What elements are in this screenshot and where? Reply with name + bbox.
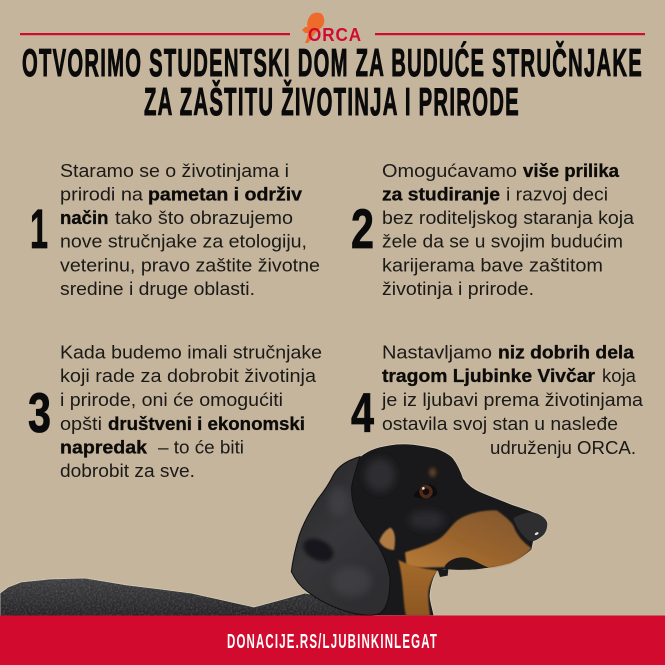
text block 4: koja xyxy=(602,365,637,386)
illustration: dachshund xyxy=(0,444,547,617)
number 2: 2 xyxy=(351,197,374,260)
text block 3: dobrobit za sve. xyxy=(60,460,195,481)
text block 3: opšti xyxy=(60,413,102,434)
text block 1: pametan i održiv xyxy=(148,184,303,204)
number 3: 3 xyxy=(28,381,51,444)
panel: point 3 xyxy=(28,342,322,481)
muzzle tan xyxy=(405,510,532,568)
footer link text: DONACIJE.RS/LJUBINKINLEGAT xyxy=(227,631,438,653)
dog head xyxy=(291,444,547,616)
number 1: 1 xyxy=(30,197,48,260)
text block 3: Kada budemo imali stručnjake xyxy=(60,342,322,362)
text block 2: životinja i prirode. xyxy=(382,278,534,299)
text block 2: i razvoj deci xyxy=(506,184,608,204)
text block 4 xyxy=(381,342,644,458)
text block 4: udruženju ORCA. xyxy=(490,437,636,458)
footer bar xyxy=(0,616,665,665)
mouth line xyxy=(445,557,488,570)
text block 1: sredine i druge oblasti. xyxy=(60,278,255,299)
text block 1: Staramo se o životinjama i xyxy=(60,160,289,181)
text block 3: društveni i ekonomski xyxy=(108,413,305,434)
text block 2: više prilika xyxy=(523,160,620,181)
skull highlights xyxy=(365,458,395,492)
panel: point 2 xyxy=(351,160,635,299)
text block 1: način xyxy=(60,207,108,228)
text block 3: i prirode, oni će omogućiti xyxy=(60,389,283,410)
logo wordmark: ORCA xyxy=(308,25,362,45)
ear xyxy=(291,457,390,615)
text block 1 xyxy=(60,160,320,299)
number 4: 4 xyxy=(351,381,374,444)
text block 3 xyxy=(60,342,322,481)
text block 1: veterinu, pravo zaštite životne xyxy=(60,254,320,276)
text block 2 xyxy=(382,160,635,299)
text block 2: bez roditeljskog staranja koja xyxy=(382,207,635,228)
text block 4: tragom Ljubinke Vivčar xyxy=(382,365,595,386)
title xyxy=(22,40,643,124)
text block 2: žele da se u svojim budućim xyxy=(382,230,623,252)
nose xyxy=(513,513,547,541)
logo: ORCA header with rules xyxy=(20,13,645,45)
text block 4: Nastavljamo xyxy=(382,342,492,362)
eye xyxy=(413,484,437,499)
text block 1: tako što obrazujemo xyxy=(115,207,293,228)
text block 3: napredak xyxy=(60,436,148,458)
text block 2: karijerama bave zaštitom xyxy=(382,254,603,276)
dog body xyxy=(0,578,373,616)
text block 3: koji rade za dobrobit životinja xyxy=(60,365,317,386)
neck tan xyxy=(398,560,438,616)
text block 2: za studiranje xyxy=(382,184,500,204)
cheek spot xyxy=(379,528,395,550)
text block 3: – to će biti xyxy=(158,436,244,458)
text block 2: Omogućavamo xyxy=(382,160,517,181)
text block 4: je iz ljubavi prema životinjama xyxy=(381,389,644,410)
text block 4: ostavila svoj stan u nasleđe xyxy=(382,413,618,434)
text block 1: nove stručnjake za etologiju, xyxy=(60,230,307,252)
head silhouette xyxy=(347,444,547,616)
panel: point 4 xyxy=(351,342,644,458)
brow spot xyxy=(429,468,436,477)
text block 4: niz dobrih dela xyxy=(498,342,635,362)
chin tuft xyxy=(438,569,448,577)
text block 1: prirodi na xyxy=(60,184,144,204)
icon: orange squirrel xyxy=(302,13,324,43)
panel: point 1 xyxy=(30,160,320,299)
